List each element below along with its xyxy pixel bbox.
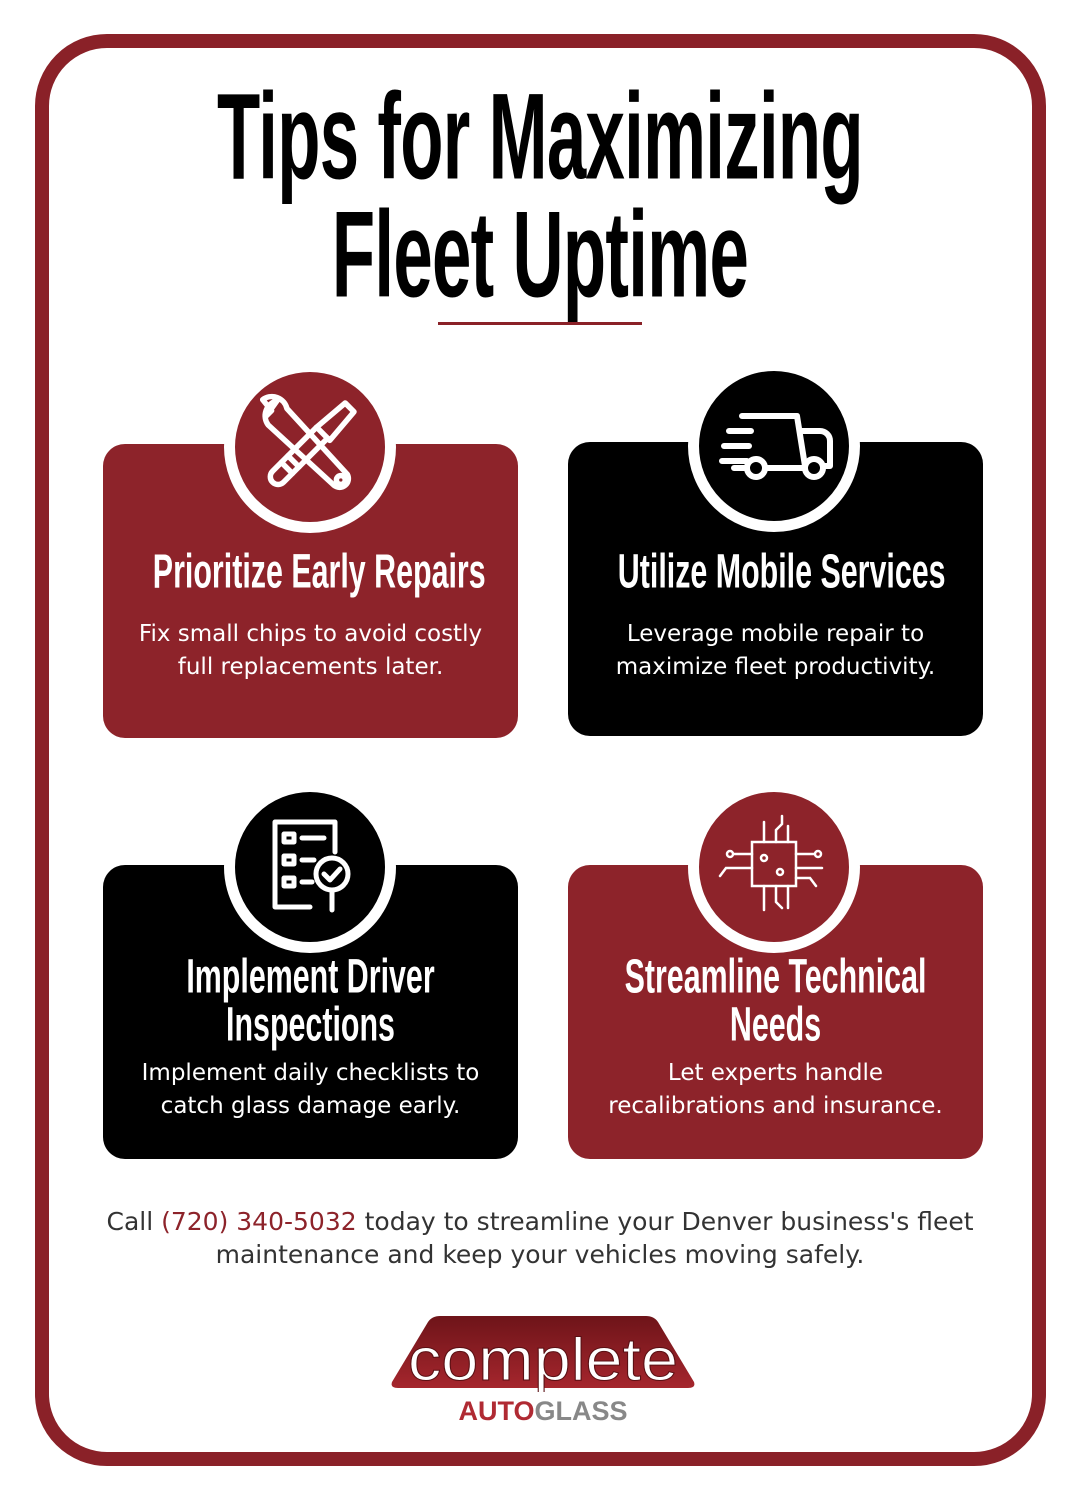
heading: technical: Streamline Technical: [625, 951, 926, 1003]
heading: technical: [625, 951, 926, 1051]
text: prioritize: Fix small chips to avoid costly: [139, 621, 482, 647]
heading: inspections: Implement Driver: [186, 951, 435, 1003]
heading: inspections: Inspections: [226, 999, 395, 1051]
heading: prioritize: Prioritize Early Repairs: [153, 546, 486, 598]
panel: technical needs: [568, 865, 983, 1159]
icon: wrench and screwdriver: [224, 361, 396, 533]
text: technical: recalibrations and insurance.: [608, 1093, 943, 1119]
text: mobile: Leverage mobile repair to: [627, 621, 924, 647]
logo: complete autoglass: [392, 1316, 694, 1426]
heading: inspections: [186, 951, 435, 1051]
text: technical: Let experts handle: [668, 1060, 883, 1086]
heading: technical: Needs: [730, 999, 821, 1051]
text: mobile: [616, 621, 935, 680]
text: technical: [608, 1060, 943, 1119]
footer call to action: [106, 1207, 974, 1269]
panel: mobile services: [568, 442, 983, 736]
icon: circuit: [688, 781, 860, 953]
text: prioritize: [139, 621, 482, 680]
title: Fleet Uptime: [332, 187, 748, 323]
panel: driver inspections: [103, 865, 518, 1159]
logo: complete autoglass: AUTOGLASS: [458, 1396, 628, 1426]
icon: checklist: [224, 781, 396, 953]
text: mobile: maximize fleet productivity.: [616, 654, 935, 680]
footer call to action: maintenance and keep your vehicles moving safely.: [216, 1240, 864, 1269]
logo: complete autoglass: complete: [408, 1326, 678, 1392]
footer call to action: Call (720) 340-5032 today to streamline your Denver business's fleet: [106, 1207, 974, 1236]
title: Tips for Maximizing: [217, 69, 863, 205]
text: inspections: catch glass damage early.: [161, 1093, 460, 1119]
icon: delivery truck: [688, 360, 860, 532]
text: inspections: Implement daily checklists to: [142, 1060, 479, 1086]
title: [217, 69, 863, 323]
panel: prioritize early repairs: [103, 444, 518, 738]
text: prioritize: full replacements later.: [178, 654, 443, 680]
text: inspections: [142, 1060, 479, 1119]
heading: mobile: Utilize Mobile Services: [618, 546, 946, 598]
